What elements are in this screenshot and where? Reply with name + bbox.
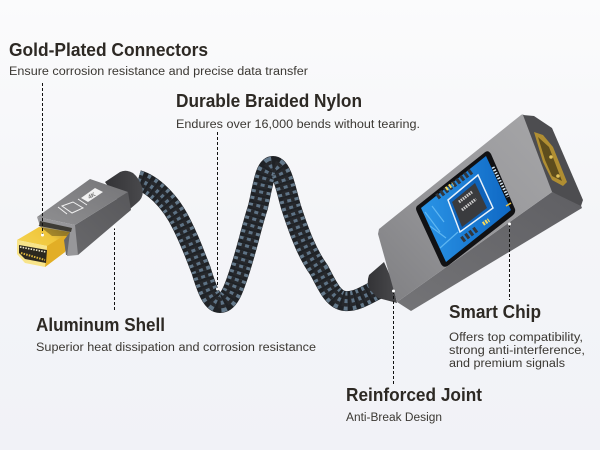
callout: aluminum shell: Superior heat dissipation and corrosion resistance xyxy=(36,342,316,354)
callout: aluminum shell: Aluminum Shell xyxy=(36,315,165,335)
braided cable xyxy=(138,166,378,303)
shell front rim xyxy=(37,217,78,256)
callout: gold-plated connectors: Ensure corrosion resistance and precise data transfer xyxy=(9,66,308,78)
hdmi port xyxy=(534,132,567,186)
callout: smart chip: strong anti-interference, xyxy=(449,345,585,357)
hdmi adapter xyxy=(368,114,583,311)
mini displayport connector xyxy=(17,171,143,267)
dark underside face xyxy=(397,192,582,311)
callout: gold-plated connectors: Gold-Plated Connectors xyxy=(9,40,208,60)
shell side face xyxy=(64,192,131,255)
callout: reinforced joint: Anti-Break Design xyxy=(346,412,442,424)
4K badge: 4K xyxy=(87,192,98,201)
main face xyxy=(378,114,552,302)
strain relief xyxy=(368,262,397,303)
callout: smart chip xyxy=(449,222,585,370)
strain relief xyxy=(105,171,143,209)
callout: gold-plated connectors xyxy=(9,40,308,236)
callout: smart chip: Smart Chip xyxy=(449,302,541,322)
callout: durable braided nylon: Durable Braided Nylon xyxy=(176,91,362,111)
shell top face xyxy=(37,179,128,225)
callout: durable braided nylon xyxy=(176,91,420,290)
front face xyxy=(523,115,583,206)
icon: display xyxy=(58,199,87,214)
callout: aluminum shell xyxy=(36,226,316,354)
callout: smart chip: and premium signals xyxy=(449,358,565,370)
callout: durable braided nylon: Endures over 16,000 bends without tearing. xyxy=(176,119,420,131)
chip window xyxy=(416,151,515,267)
callout: smart chip: Offers top compatibility, xyxy=(449,332,583,344)
callout: reinforced joint xyxy=(346,290,482,424)
callout: reinforced joint: Reinforced Joint xyxy=(346,385,482,405)
gold plug xyxy=(17,225,72,267)
